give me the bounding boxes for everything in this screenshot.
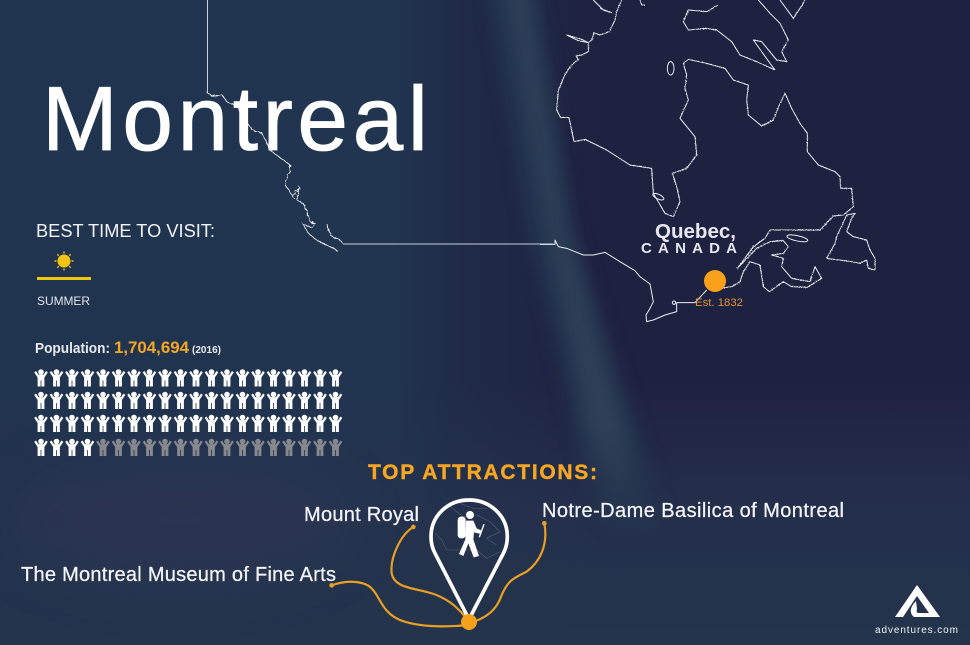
attraction label: Notre-Dame Basilica: Notre-Dame Basilica of Montreal xyxy=(542,500,844,522)
season bar xyxy=(37,277,91,280)
season label: SUMMER xyxy=(37,294,90,308)
Hudson Strait and Ungava xyxy=(683,0,788,70)
heading: best time to visit: BEST TIME TO VISIT: xyxy=(36,221,215,241)
British Columbia coast xyxy=(208,93,343,251)
map marker: Montreal location xyxy=(704,270,726,292)
map of Canada outline xyxy=(208,0,875,322)
population line xyxy=(35,338,221,357)
connector curves xyxy=(329,521,547,626)
Newfoundland xyxy=(827,213,875,270)
title: Montreal xyxy=(42,69,428,170)
attraction label: Museum of Fine Arts: The Montreal Museum of Fine Arts xyxy=(21,564,336,586)
hiker icon xyxy=(458,511,485,557)
Hudson Bay and Labrador coast xyxy=(557,0,875,292)
logo wordmark: adventures.com xyxy=(875,625,958,636)
map label: Quebec, Canada: CANADA xyxy=(641,240,737,257)
pin outline xyxy=(431,500,507,619)
Ontario and south Quebec smooth edge xyxy=(540,240,707,322)
location pin with hiker xyxy=(431,500,507,619)
population line: 1,704,694 xyxy=(114,338,190,357)
map label: Quebec, Canada xyxy=(641,221,737,257)
logo mark xyxy=(895,585,940,617)
pin anchor dot xyxy=(461,614,477,630)
label: established date: Est. 1832 xyxy=(695,297,743,309)
straight US border segments xyxy=(208,0,553,244)
icon: sun xyxy=(54,252,74,270)
population line: Population: xyxy=(35,340,110,357)
logo: adventures.com xyxy=(875,585,958,636)
population line: (2016) xyxy=(192,345,221,356)
pictogram: population people icons xyxy=(34,369,342,456)
faint map inside pin xyxy=(435,503,500,558)
lakes and islands xyxy=(667,62,674,75)
attraction label: Mount Royal: Mount Royal xyxy=(304,504,419,526)
northern islands xyxy=(593,0,805,18)
heading: top attractions: TOP ATTRACTIONS: xyxy=(368,461,597,484)
map label: Quebec, Canada: Quebec, xyxy=(655,221,736,243)
